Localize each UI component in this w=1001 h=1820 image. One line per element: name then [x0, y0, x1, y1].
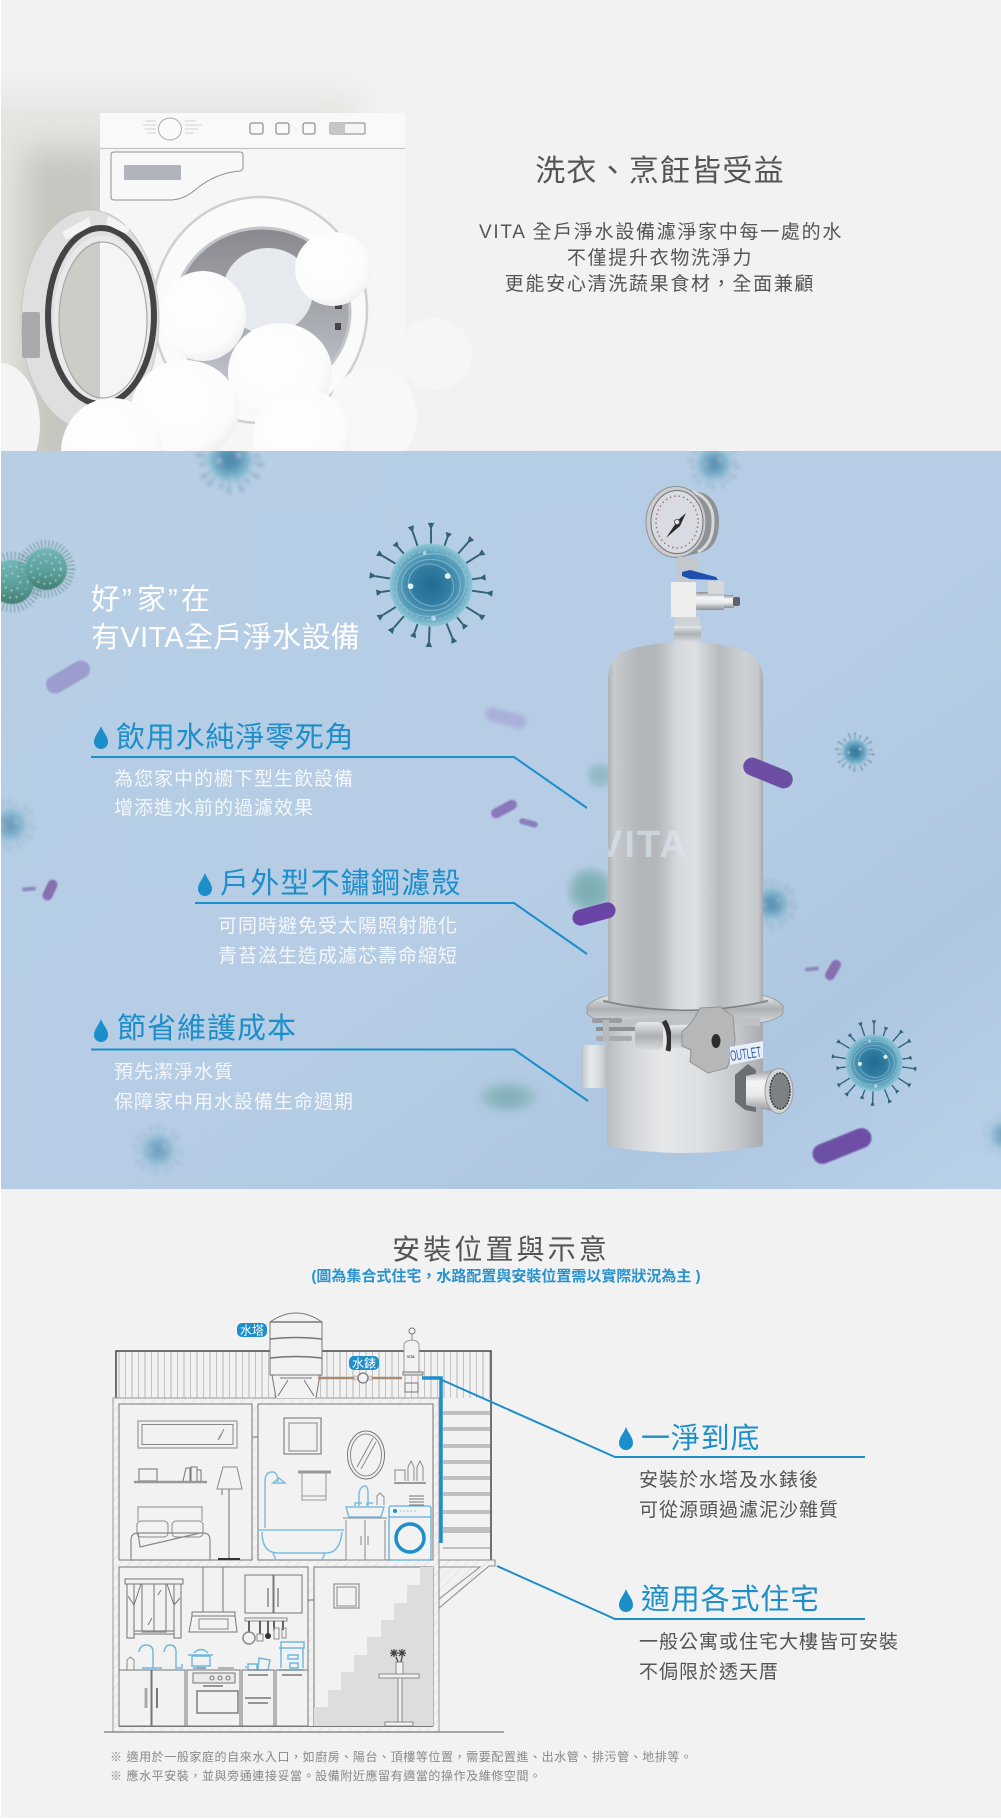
room: kitchen: [119, 1567, 308, 1726]
mini filter: VITA: [407, 1355, 415, 1359]
icon: washer door: [21, 210, 160, 430]
callout: clean from the source: [442, 1380, 865, 1521]
callout: clean from the source: 安裝於水塔及水錶後: [639, 1469, 819, 1491]
room: bathroom: [258, 1404, 433, 1560]
green bacteria cluster: [0, 547, 68, 605]
knob hole: [712, 1034, 720, 1048]
clamp ring: [587, 990, 783, 1032]
purple bacteria in front of filter: [571, 755, 795, 927]
callout: suits all housing: [497, 1566, 899, 1683]
rail frame: [116, 1351, 491, 1560]
footnotes: ※ 適用於一般家庭的自來水入口，如廚房、陽台、頂樓等位置，需要配置進、出水管、排污管、地排等。: [110, 1749, 693, 1764]
house illustration: [104, 1313, 504, 1732]
heading: 有VITA全戶淨水設備: [91, 621, 360, 654]
feature: outdoor housing: 可同時避免受太陽照射脆化: [218, 915, 458, 937]
feature: drinking water: 飲用水純淨零死角: [116, 721, 354, 754]
pressure gauge: [646, 486, 719, 558]
icon: large coronavirus top: [369, 523, 493, 647]
feature: outdoor housing: 戶外型不鏽鋼濾殼: [220, 867, 462, 900]
OUTLET label: [729, 1041, 763, 1065]
balcony: [439, 1560, 495, 1608]
feature: maintenance cost: [91, 1012, 588, 1113]
sub heading: (圖為集合式住宅，水路配置與安裝位置需以實際狀況為主 ): [311, 1267, 701, 1285]
callout: suits all housing: 不侷限於透天厝: [639, 1661, 779, 1683]
VITA engraving: VITA: [597, 824, 689, 866]
purple bacteria pills: [22, 657, 874, 1167]
callout: clean from the source: 可從源頭過濾泥沙雜質: [639, 1499, 839, 1521]
water meter tag: 水錶: [352, 1356, 376, 1370]
feature: maintenance cost: 預先潔淨水質: [114, 1061, 234, 1083]
feature: outdoor housing: [195, 867, 587, 967]
body text: 更能安心清洗蔬果食材，全面兼顧: [505, 273, 815, 295]
feature: drinking water: 增添進水前的過濾效果: [114, 797, 314, 819]
callout: clean from the source: 一淨到底: [641, 1422, 760, 1455]
heading: 洗衣、烹飪皆受益: [535, 155, 785, 188]
ground line: [104, 1731, 504, 1733]
wall shadow behind washing machine: [0, 95, 360, 495]
lower housing and inlet: [581, 1020, 763, 1153]
feature: outdoor housing: 青苔滋生造成濾芯壽命縮短: [218, 945, 458, 967]
heading: 好”家”在: [91, 583, 210, 616]
feature: maintenance cost: 保障家中用水設備生命週期: [114, 1091, 354, 1113]
panel: VITA filter features on blue background: [0, 451, 1001, 1189]
callout: suits all housing: 適用各式住宅: [641, 1583, 820, 1616]
feature: maintenance cost: 節省維護成本: [117, 1012, 297, 1045]
outlet fitting: [735, 1064, 793, 1114]
main housing: [608, 642, 763, 1010]
building walls: [113, 1398, 439, 1732]
valve assembly: [671, 557, 740, 642]
feature: drinking water: [91, 721, 587, 819]
water tower tag: 水塔: [240, 1324, 264, 1338]
OUTLET label: OUTLET: [729, 1044, 762, 1065]
body text: VITA 全戶淨水設備濾淨家中每一處的水: [479, 221, 843, 243]
footnotes: ※ 應水平安裝，並與旁通連接妥當。設備附近應留有適當的操作及維修空間。: [110, 1768, 542, 1783]
blurred background microbes: [0, 427, 1001, 1175]
icon: washing machine: [100, 113, 405, 451]
feature: drinking water: 為您家中的櫥下型生飲設備: [114, 768, 354, 790]
clamp bolt: [592, 1018, 689, 1051]
balls tumbling out of the washer: [0, 232, 472, 506]
icon: stainless steel filter: [581, 486, 793, 1153]
icon: coronavirus right: [832, 1020, 917, 1106]
room: staircase: [119, 1567, 433, 1727]
room notches: [252, 1437, 314, 1600]
panel: laundry and cooking benefits: [0, 0, 1001, 451]
water tower: [270, 1313, 322, 1398]
room: bedroom: [119, 1404, 252, 1560]
panel: installation location: [0, 1189, 1001, 1818]
rooftop railing: [116, 1351, 491, 1398]
water meter and pipe: [318, 1373, 402, 1383]
heading: [91, 583, 360, 654]
mini filter: [403, 1328, 423, 1392]
blue water pipe: [422, 1378, 441, 1543]
callout: suits all housing: 一般公寓或住宅大樓皆可安裝: [639, 1631, 899, 1653]
body text: [479, 221, 843, 295]
body text: 不僅提升衣物洗淨力: [567, 247, 753, 269]
heading: 安裝位置與示意: [392, 1234, 610, 1265]
footnotes: [110, 1749, 693, 1783]
knob: [682, 1007, 735, 1073]
stairwell strips: [443, 1412, 490, 1548]
